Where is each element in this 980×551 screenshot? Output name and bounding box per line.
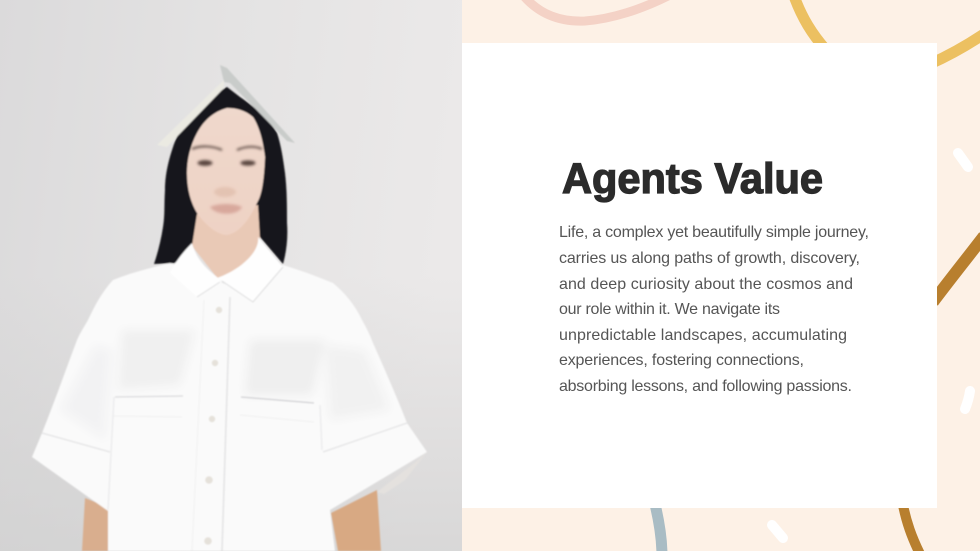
neck [192, 205, 262, 279]
body paragraph: experiences, fostering connections, [559, 352, 804, 369]
soft shading [124, 334, 376, 410]
book [157, 65, 295, 147]
buttons [204, 307, 222, 545]
hair [154, 87, 287, 264]
white text card [462, 43, 937, 508]
body paragraph [559, 224, 869, 395]
body paragraph: our role within it. We navigate its [559, 301, 780, 318]
eyebrows, eyes, nose and lips [192, 146, 262, 214]
photo wall backdrop [0, 0, 462, 551]
arms [82, 490, 381, 551]
pockets [115, 396, 183, 397]
decorative curves and dashes [522, 0, 980, 551]
placket line [222, 297, 230, 551]
cuff lines [42, 433, 110, 452]
body paragraph: carries us along paths of growth, discovery, [559, 250, 860, 267]
body paragraph: unpredictable landscapes, accumulating [559, 327, 847, 344]
body paragraph: absorbing lessons, and following passions. [559, 378, 852, 395]
face [187, 108, 265, 235]
body paragraph: Life, a complex yet beautifully simple journey, [559, 224, 869, 241]
background panel: cream [462, 0, 980, 551]
collar [174, 242, 222, 282]
heading: Agents Value [562, 155, 823, 203]
body paragraph: and deep curiosity about the cosmos and [559, 276, 853, 293]
photo: woman with a book on her head [0, 0, 462, 551]
body side folds [108, 397, 322, 510]
woman figure [32, 65, 427, 551]
white shirt [32, 237, 427, 551]
